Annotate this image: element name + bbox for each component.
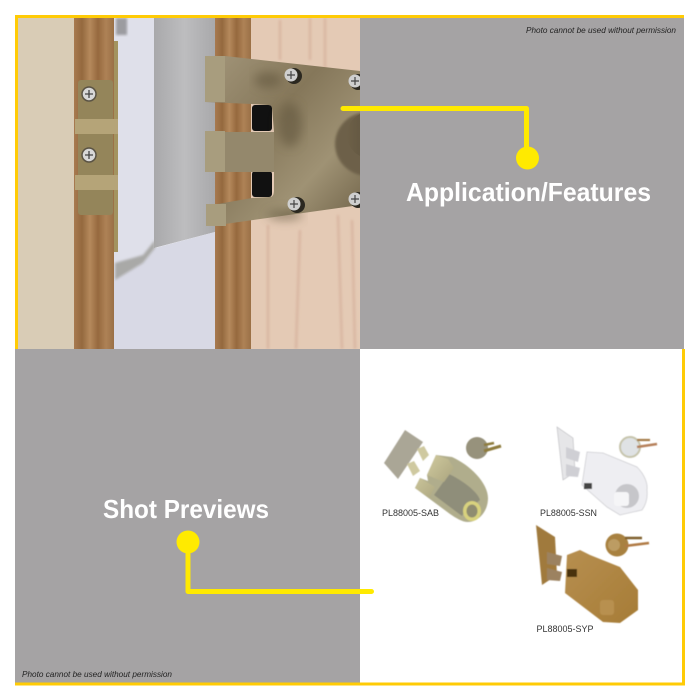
panel: door lock photo (18, 18, 360, 349)
plate tarnish (254, 72, 303, 220)
product: SAB lock (384, 430, 501, 522)
notice: top: Photo cannot be used without permission (526, 25, 676, 35)
door leaf (251, 18, 360, 349)
panel: shot previews white (360, 349, 682, 683)
knob centre (358, 114, 360, 116)
label: SYP: PL88005-SYP (536, 624, 594, 635)
hallway floor (155, 232, 215, 349)
strike edge (114, 41, 118, 252)
frame right (215, 18, 251, 349)
heading: shot previews: Shot Previews (103, 494, 269, 524)
slots (252, 105, 272, 131)
arrow: previews connector (176, 530, 372, 592)
product: SSN lock (557, 427, 657, 515)
skirting (115, 240, 155, 280)
arrow: application connector (343, 108, 539, 170)
screws (284, 68, 366, 213)
bolts (205, 56, 225, 102)
label: SAB: PL88005-SAB (382, 508, 439, 519)
wall (18, 18, 74, 349)
panel: shot previews gray (15, 349, 360, 684)
panel: application gray (360, 18, 684, 349)
hallway wall (114, 18, 155, 280)
heading: application: Application/Features (406, 177, 651, 207)
knob (334, 112, 360, 176)
door grain (268, 18, 355, 349)
strike plate (75, 80, 118, 215)
product: SYP lock (536, 525, 649, 623)
sign at top (116, 18, 127, 35)
frame left (74, 18, 114, 349)
notice: bottom: Photo cannot be used without permission (22, 669, 172, 679)
lock plate (205, 56, 360, 226)
hallway elevator (154, 18, 215, 248)
label: SSN: PL88005-SSN (540, 508, 597, 519)
